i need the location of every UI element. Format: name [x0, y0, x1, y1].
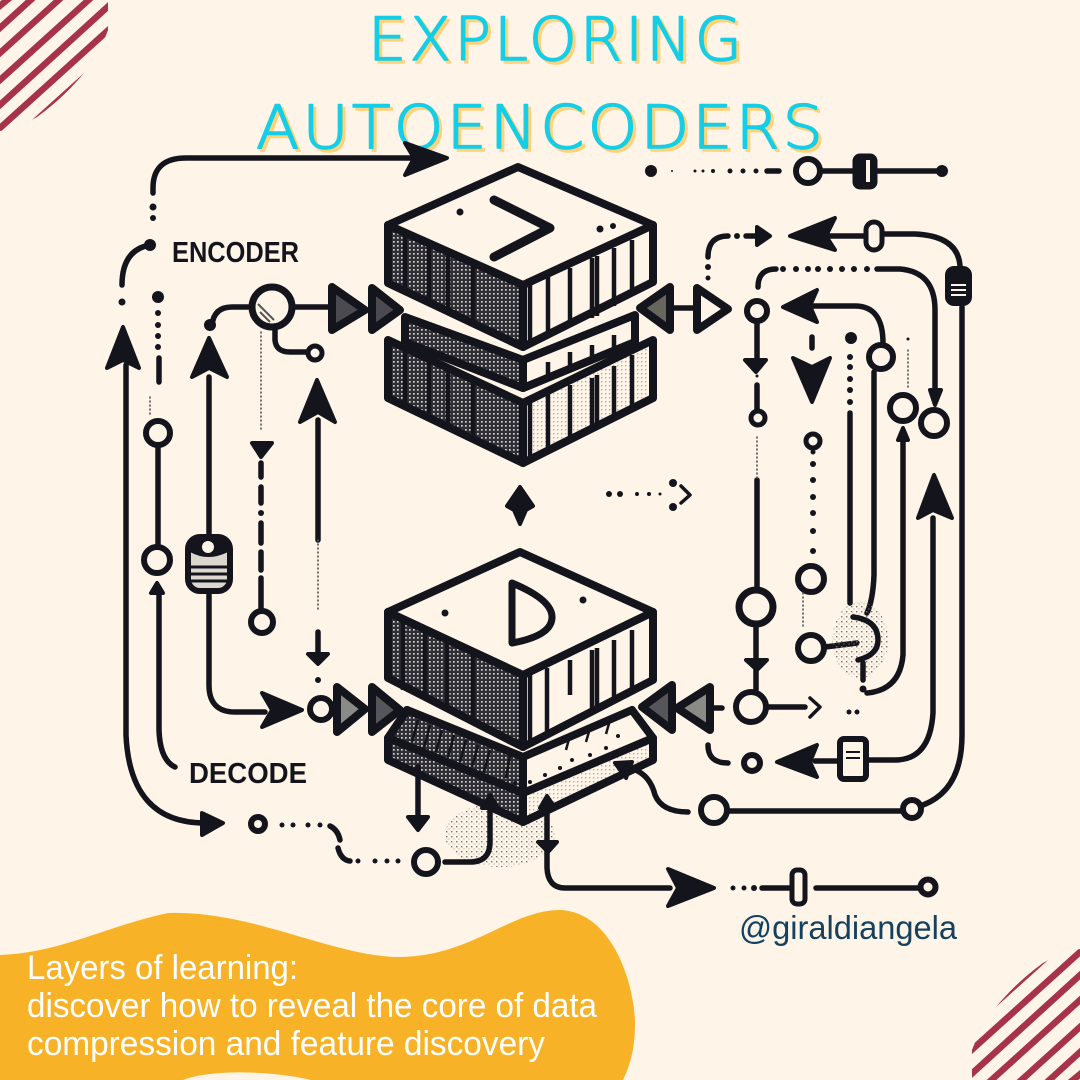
arrow: inner right loop [783, 290, 893, 613]
decoder: plate streaks [412, 720, 610, 778]
connector: dotted line long [845, 332, 857, 603]
icon: triangles decoder left [310, 687, 400, 732]
arrow: big up with loop to bottom [867, 475, 952, 760]
arrow: big down with dotted line [793, 337, 857, 661]
title [256, 5, 829, 166]
connector: stippled arc [832, 602, 888, 692]
decoder: plate dots [513, 734, 620, 785]
connector: dotted top loop to ring [758, 266, 947, 436]
connector: dot to left column [118, 239, 156, 306]
arrow: into decoder right [615, 762, 688, 812]
caption text: discover how to reveal the core of data [27, 987, 598, 1025]
title: AUTOENCODERS [256, 93, 826, 163]
connector: central right column [739, 301, 773, 690]
icon: right cylinder [945, 266, 972, 306]
encoder: face dots [456, 208, 616, 232]
arrow: decoder bottom right to long arrow [538, 796, 714, 906]
label: ENCODER: ENCODER [172, 237, 299, 269]
arrow: center up-down [507, 487, 533, 524]
connector: bottom right ring line [701, 797, 921, 823]
decoration: bottom-right striped corner [972, 949, 1080, 1080]
label: DECODE: DECODE [189, 758, 307, 790]
arrow: top long connector [150, 143, 447, 221]
icon: triangles encoder left [332, 287, 400, 330]
icon: lower right cylinder [840, 739, 866, 779]
arrow: big left into small ring [708, 745, 838, 777]
connector: decoder bottom to ring [445, 795, 498, 862]
title: EXPLORING [368, 5, 745, 75]
caption text: compression and feature discovery [27, 1025, 546, 1063]
decoder: lower plate [388, 710, 653, 822]
arrow: left long loop to decode [107, 327, 223, 835]
icon: left cylinder [188, 537, 230, 591]
stipple shading under decoder [445, 803, 555, 867]
encoder input node [204, 287, 332, 360]
title: EXPLORING [371, 8, 748, 78]
encoder: chevron symbol [494, 200, 550, 257]
connector: dashed curve and small arrow [705, 227, 770, 280]
caption text [27, 949, 598, 1063]
handle text: @giraldiangela [739, 909, 958, 946]
arrow: dashed descending from encoder node [251, 332, 273, 633]
decoder: top slab [388, 552, 653, 747]
decoder: D symbol [512, 583, 552, 643]
encoder: top slab [388, 167, 653, 347]
connector: dotted bottom left path [251, 817, 438, 874]
arrow: up arrow and dashed line to decoder [300, 380, 335, 683]
caption blob [0, 910, 635, 1080]
encoder block [388, 167, 653, 463]
encoder: lower layer [388, 340, 653, 463]
icon: triangles encoder right [640, 287, 728, 330]
icon: triangles decoder right [642, 685, 820, 730]
decoder block [388, 552, 653, 822]
decoration: top-left striped corner [0, 0, 108, 131]
connector: bottom dotted line with capsule [730, 870, 936, 904]
right top dotted line with cylinder [645, 155, 948, 188]
encoder: middle band [405, 315, 635, 388]
decoder: face dots [442, 596, 586, 616]
arrow: third column with cylinder [192, 338, 302, 727]
connector: second left column [144, 291, 175, 767]
caption text: Layers of learning: [27, 949, 298, 987]
encoder: side ribs [405, 235, 632, 462]
arrow: into right top loop [790, 218, 962, 805]
arrow: decoder bottom left down [408, 767, 428, 830]
title: AUTOENCODERS [259, 96, 829, 166]
decoder: side ribs [403, 622, 632, 745]
connector: ring line with small arrow [846, 338, 916, 714]
arrow: center dotted [606, 479, 690, 511]
